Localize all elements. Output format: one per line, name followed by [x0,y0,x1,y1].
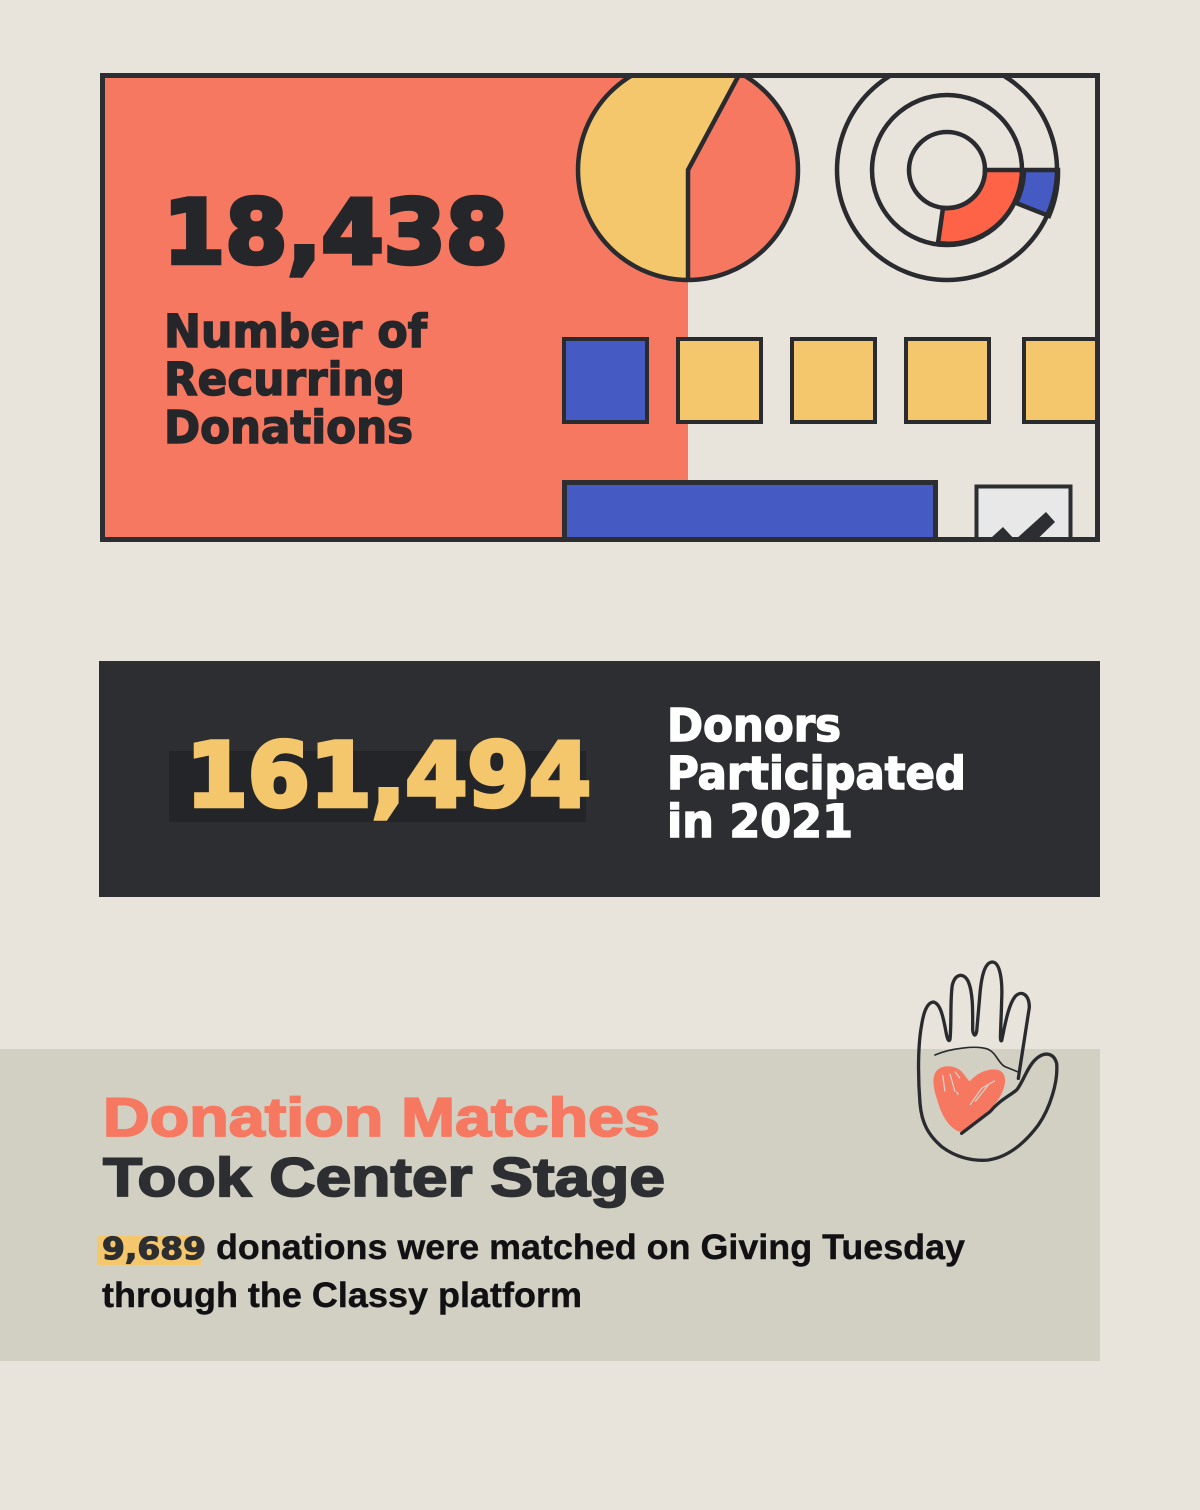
label: donors participated in 2021 [667,699,966,848]
icon: checkbox [974,484,1072,537]
number shadow band [169,751,586,822]
icon: hand holding heart [919,962,1057,1160]
panel: recurring donations [102,60,1107,556]
label: number of recurring donations: Recurring [164,353,405,406]
panel border [102,76,1098,540]
heading: took center stage: Took Center Stage [103,1146,665,1208]
icon: radial chart [837,60,1058,280]
palm crease [935,1047,1017,1072]
number highlight [97,1236,201,1265]
blue bar [564,482,936,544]
icon: pie chart [578,60,798,280]
label: donors participated in 2021: Participated [667,747,966,800]
dark background [99,661,1100,897]
heart [933,1066,1005,1132]
label: donors participated in 2021: in 2021 [667,795,853,848]
illustration: shapes [564,60,1107,556]
label: donors participated in 2021: Donors [667,699,841,752]
label: number of recurring donations: Donations [164,401,413,454]
body text: through the Classy platform [102,1276,582,1315]
heading: donation matches: Donation Matches [103,1086,660,1148]
body text: 9,689 [102,1232,206,1267]
body text [102,1228,966,1315]
hand outline [919,962,1057,1160]
label: number of recurring donations: Number of [164,305,427,358]
coral block [103,76,688,539]
squares row [564,339,1107,422]
big number: 161,494: 161,494 [186,724,591,827]
body text: donations were matched on Giving Tuesday [216,1228,966,1267]
big number: 18,438: 18,438 [163,181,508,284]
heart scratches [943,1072,995,1105]
infographic canvas [0,73,1100,1361]
panel: donors participated [99,661,1100,897]
panel: donation matches [0,962,1100,1361]
panel background [103,76,1097,539]
label: number of recurring donations [164,305,427,454]
band background [0,1049,1100,1361]
